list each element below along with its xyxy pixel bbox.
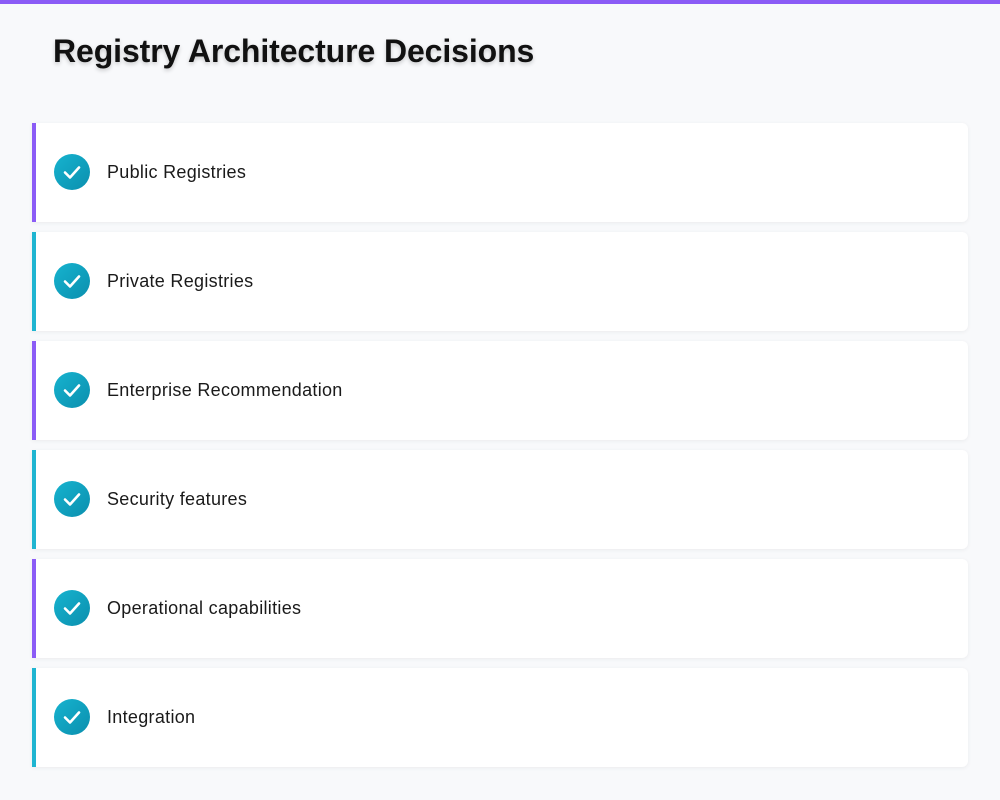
icon: check <box>54 699 90 735</box>
label: Enterprise Recommendation <box>107 380 343 400</box>
card: Public Registries <box>32 123 968 222</box>
card: Operational capabilities <box>32 559 968 658</box>
card: Private Registries <box>32 232 968 331</box>
label: Public Registries <box>107 162 246 182</box>
icon: check <box>54 263 90 299</box>
icon: check <box>54 372 90 408</box>
icon: check <box>54 154 90 190</box>
title: Registry Architecture Decisions <box>53 33 534 69</box>
label: Security features <box>107 489 247 509</box>
label: Private Registries <box>107 271 253 291</box>
icon: check <box>54 590 90 626</box>
card: Enterprise Recommendation <box>32 341 968 440</box>
card: Security features <box>32 450 968 549</box>
icon: check <box>54 481 90 517</box>
label: Operational capabilities <box>107 598 301 618</box>
label: Integration <box>107 707 195 727</box>
card: Integration <box>32 668 968 767</box>
